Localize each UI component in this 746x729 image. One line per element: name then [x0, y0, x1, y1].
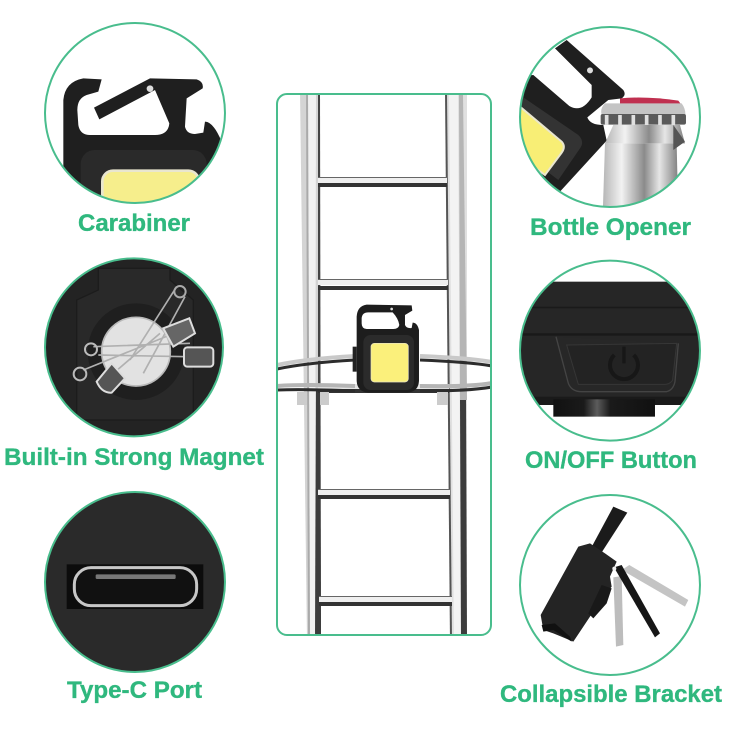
panel: bottle opener: [510, 27, 700, 241]
photo: power button: [510, 261, 710, 441]
panel: ladder photo: [277, 90, 492, 640]
ladder: [277, 90, 492, 640]
label: Built-in Strong Magnet: Built-in Strong Magnet: [4, 444, 264, 471]
panel: type-c port: [45, 492, 225, 704]
label: ON/OFF Button: ON/OFF Button: [525, 447, 697, 474]
label: Bottle Opener: Bottle Opener: [530, 214, 691, 241]
photo: bottle opener close-up: [510, 27, 700, 217]
photo: USB-C port: [45, 492, 225, 672]
frame border: [277, 94, 491, 635]
photo: carabiner close-up: [44, 22, 226, 204]
photo: magnet with safety pins: [40, 253, 230, 443]
panel: built-in strong magnet: [4, 253, 264, 471]
label: Type-C Port: Type-C Port: [67, 677, 202, 704]
panel: collapsible bracket: [500, 495, 722, 708]
label: Collapsible Bracket: Collapsible Bracket: [500, 681, 722, 708]
label: Carabiner: Carabiner: [78, 210, 190, 237]
photo: folding bracket: [520, 495, 700, 675]
panel: on/off button: [519, 260, 701, 469]
panel: carabiner: [45, 23, 225, 237]
icon: keychain light on ladder: [353, 305, 419, 393]
